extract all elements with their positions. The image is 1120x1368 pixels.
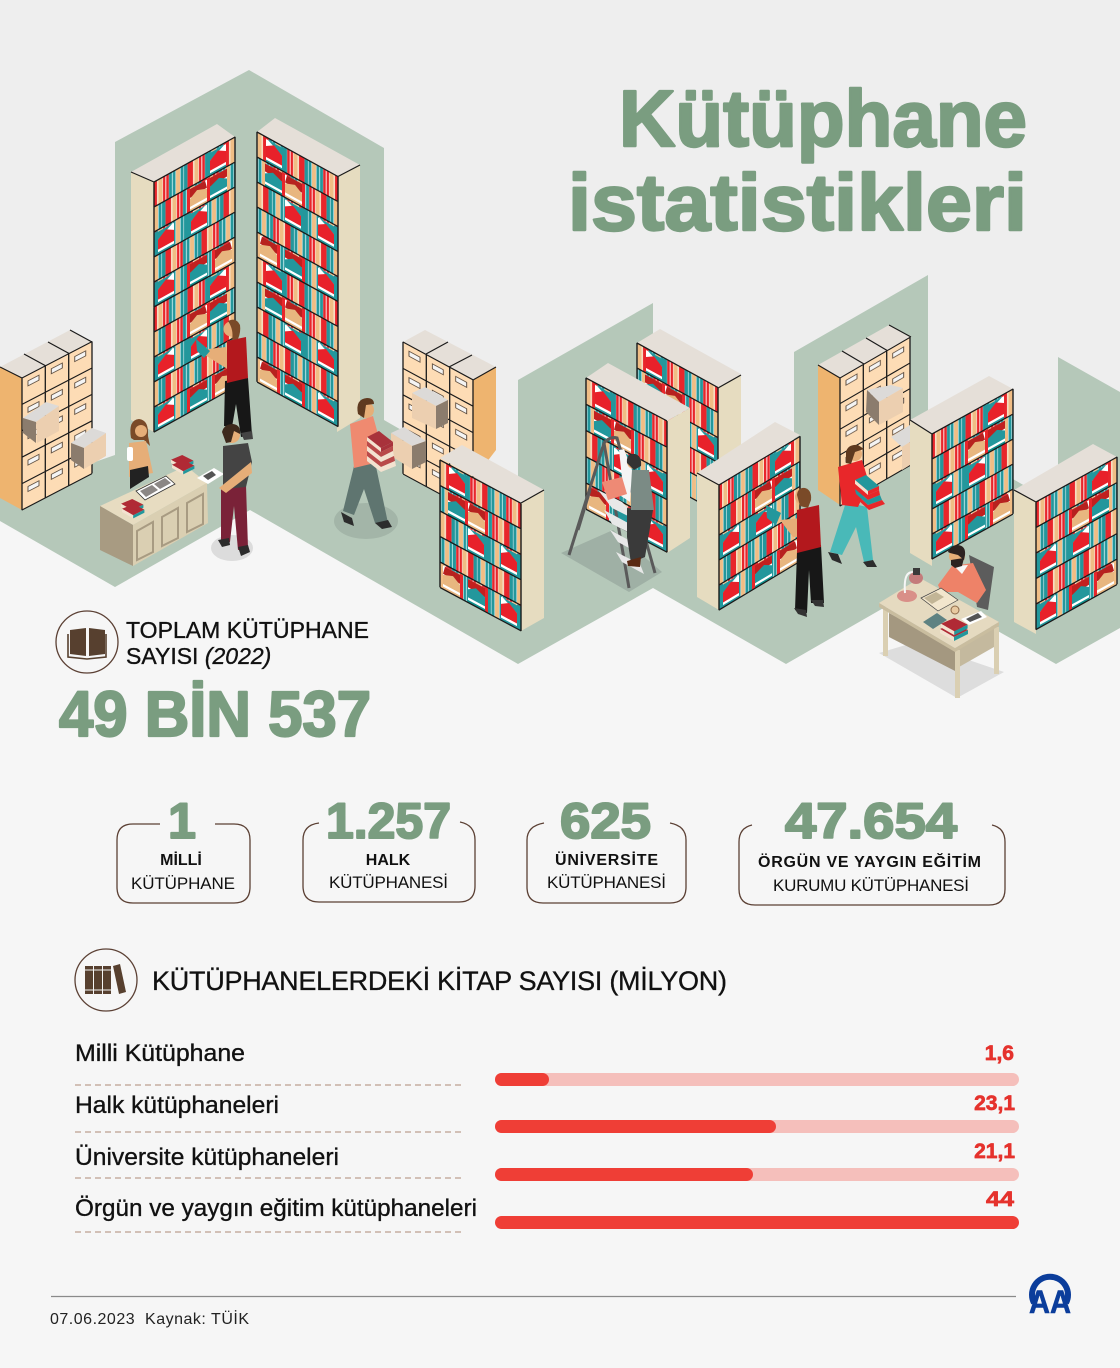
box: orgun: ÖRGÜN VE YAYGIN EĞİTİM	[758, 852, 981, 871]
heading: total libraries	[126, 617, 369, 669]
bookshelf right 1	[910, 376, 1013, 566]
title	[568, 74, 1027, 247]
bar chart	[495, 1042, 1019, 1229]
title: Kütüphane	[619, 74, 1027, 163]
box: milli	[117, 793, 250, 903]
icon: open book	[56, 611, 118, 673]
bookshelf front	[440, 445, 544, 631]
bookshelf aisle with ladder	[586, 363, 690, 553]
row labels	[75, 1040, 477, 1222]
icon: books	[75, 949, 137, 1011]
bar: milli	[495, 1042, 1019, 1086]
box: halk: HALK	[366, 852, 411, 869]
title: istatistikleri	[568, 158, 1027, 247]
row labels: Halk kütüphaneleri	[75, 1092, 279, 1119]
bar: halk: 23,1	[974, 1092, 1015, 1115]
logo: AA	[1029, 1284, 1071, 1320]
bar: halk	[495, 1092, 1019, 1133]
file cabinet right	[391, 330, 496, 512]
box: halk: KÜTÜPHANESİ	[329, 873, 448, 892]
box: orgun: KURUMU KÜTÜPHANESİ	[773, 876, 969, 895]
box: universite: 625	[560, 793, 651, 849]
bar: orgun: 44	[986, 1188, 1014, 1211]
desk	[879, 568, 1004, 698]
bar: universite	[495, 1140, 1019, 1181]
box: orgun: 47.654	[785, 793, 957, 849]
box: milli: MİLLİ	[160, 851, 202, 869]
box: halk: 1.257	[326, 793, 451, 849]
bookshelf back aisle	[637, 329, 741, 513]
row labels: Milli Kütüphane	[75, 1040, 245, 1067]
box: universite: KÜTÜPHANESİ	[547, 873, 666, 892]
bar: milli: 1,6	[985, 1042, 1014, 1065]
heading: books count: KÜTÜPHANELERDEKİ KİTAP SAYISI (MİLYON)	[152, 965, 727, 996]
bookshelf tall right	[257, 118, 360, 432]
box: universite	[527, 793, 686, 903]
illustration: library	[0, 70, 1120, 698]
man carrying books	[334, 398, 398, 539]
man at desk	[938, 545, 994, 610]
bookshelf tall left	[131, 124, 235, 432]
woman at counter	[127, 419, 153, 489]
box: milli: 1	[168, 793, 196, 849]
row labels: Örgün ve yaygın eğitim kütüphaneleri	[75, 1195, 477, 1222]
box: universite: ÜNİVERSİTE	[555, 850, 658, 869]
source: 07.06.2023 Kaynak: TÜİK	[50, 1309, 249, 1328]
heading: total libraries: SAYISI (2022)	[126, 643, 271, 669]
row labels: Üniversite kütüphaneleri	[75, 1144, 339, 1171]
bar: orgun	[495, 1188, 1019, 1229]
person at tall shelf	[196, 320, 253, 440]
heading: total libraries: TOPLAM KÜTÜPHANE	[126, 617, 369, 643]
total number: 49 BİN 537	[59, 678, 371, 750]
person carrying books	[828, 445, 885, 567]
box: orgun	[739, 793, 1005, 905]
file cabinet back right	[818, 325, 911, 506]
counter	[100, 455, 224, 566]
box: milli: KÜTÜPHANE	[131, 874, 235, 893]
bookshelf right 2	[1014, 444, 1117, 634]
man at center shelf	[766, 488, 824, 617]
bookshelf center	[697, 422, 800, 610]
bar: universite: 21,1	[974, 1140, 1015, 1163]
footer rule	[51, 1296, 1016, 1298]
wall and floor	[0, 70, 1120, 664]
box: halk	[303, 793, 475, 902]
man at counter	[211, 424, 253, 561]
man on ladder	[561, 438, 662, 592]
file cabinet left	[0, 330, 106, 510]
